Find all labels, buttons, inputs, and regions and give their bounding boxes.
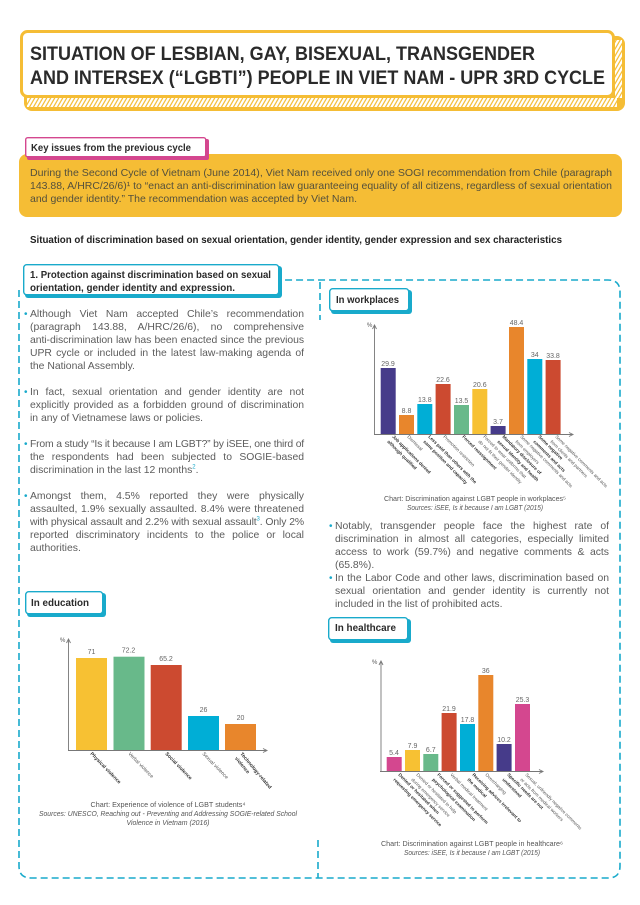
- heading: in workplaces: [330, 289, 412, 314]
- text: protection bullets: anti-discrimination law has been enacted since the previous: [30, 335, 304, 346]
- title banner: AND INTERSEX (“LGBTI”) PEOPLE IN VIET NAM - UPR 3RD CYCLE: [30, 68, 605, 89]
- heading: key issues: Key issues from the previous cycle: [31, 142, 191, 154]
- chart: workplaces: 8.8: [402, 408, 411, 415]
- heading: in healthcare: In healthcare: [335, 622, 396, 634]
- axis labels: education: Technology-related: [238, 751, 272, 790]
- text: protection bullets: explicitly provided as a forbidden ground of discrimination: [30, 400, 304, 411]
- axis labels: education: violence: [233, 756, 251, 775]
- text: protection bullets: in any of Vietnamese laws or policies.: [30, 413, 203, 424]
- chart: healthcare: 6.7: [426, 747, 436, 754]
- text: protection bullets: (paragraph 143.88, A/HRC/26/6), no comprehensive: [30, 322, 304, 333]
- heading: protection against discrimination: 1. Protection against discrimination based on sexual: [30, 269, 271, 281]
- chart: workplaces: 13.5: [455, 398, 468, 405]
- text: •: [329, 521, 333, 532]
- text: workplace bullets: (65.8%).: [335, 560, 374, 571]
- text: •: [24, 491, 28, 502]
- axis labels: healthcare: the medical: [466, 777, 488, 799]
- text: key issues body: and gender identity.” The recommendation was accepted by Viet Nam.: [30, 193, 357, 205]
- text: protection bullets: From a study “Is it because I am LGBT?” by iSEE, one third of: [30, 439, 304, 450]
- text: key issues body: During the Second Cycle of Vietnam (June 2014), Viet Nam received only one SOGI recommendation from Chile (paragraph: [30, 167, 612, 179]
- chart: education: 72.2: [122, 648, 135, 654]
- chart: workplaces: 48.4: [510, 320, 523, 327]
- chart: workplaces: %: [367, 323, 373, 329]
- panel: key issues background: [19, 154, 622, 217]
- text: •: [24, 439, 28, 450]
- axis labels: healthcare: Receiving advices irrelevant to: [471, 772, 523, 824]
- chart: education: 65.2: [159, 656, 173, 663]
- axis labels: workplaces: do not fit their gender identity: [477, 439, 523, 485]
- axis labels: healthcare: Overcharging: [484, 772, 508, 796]
- caption: education chart: Chart: Experience of violence of LGBT students⁴: [90, 800, 245, 809]
- axis labels: workplaces: Job applications denied: [391, 434, 432, 475]
- text: workplace bullets: access to work (59.7%) and negative comments & acts: [335, 547, 609, 558]
- title banner: [22, 32, 625, 111]
- axis labels: workplaces: Promotion restriction: [442, 434, 476, 468]
- chart: healthcare: 21.9: [442, 706, 456, 713]
- dashed section border: [19, 280, 620, 878]
- chart: healthcare: 36: [482, 668, 490, 675]
- text: workplace bullets: included in the list of prohibited acts.: [335, 599, 503, 610]
- axis labels: workplaces: Some negative comments and acts: [519, 434, 574, 489]
- axis labels: healthcare: Verbal medical treatment: [449, 772, 489, 812]
- axis labels: education: Social violence: [164, 751, 193, 782]
- text: workplace bullets: sexual orientation and gender identity is currently not: [335, 586, 609, 597]
- axis labels: healthcare: Denied or hesitated when: [397, 772, 440, 815]
- axis labels: workplaces: Some negative: [537, 434, 564, 461]
- text: workplace bullets: [329, 521, 610, 610]
- axis labels: healthcare: Denied or hesitated to help: [415, 772, 458, 815]
- axis labels: healthcare: Forced or suggested to perform: [436, 772, 489, 825]
- chart: workplaces: 34: [531, 352, 539, 359]
- caption: healthcare chart: [381, 839, 563, 857]
- axis labels: workplaces: Less paid than others with the: [427, 434, 478, 485]
- text: protection bullets: the respondents had been subjected to SOGIE-based: [30, 452, 304, 463]
- text: •: [329, 573, 333, 584]
- axis labels: healthcare: Sexual, unfriendly negative comments: [524, 772, 583, 831]
- text: protection bullets: UPR cycle or included in the latest law-making agenda of: [30, 348, 304, 359]
- text: key issues body: [30, 167, 612, 205]
- chart: workplaces: 29.9: [381, 361, 395, 368]
- caption: workplaces chart: [384, 494, 566, 512]
- caption: education chart: [39, 800, 297, 827]
- axis labels: healthcare: or acts from medical workers: [519, 777, 565, 823]
- caption: healthcare chart: Sources: iSEE, Is it because I am LGBT (2015): [404, 848, 540, 857]
- text: •: [24, 309, 28, 320]
- text: protection bullets: the National Assembly.: [30, 361, 135, 372]
- axis labels: education: Physical violence: [89, 751, 122, 786]
- caption: education chart: Violence in Vietnam (2016): [126, 818, 210, 827]
- caption: workplaces chart: Sources: iSEE, Is it because I am LGBT (2015): [407, 503, 543, 512]
- heading: in education: [26, 592, 106, 617]
- text: key issues body: 143.88, A/HRC/26/6)¹ to “enact an anti-discrimination law guaranteeing equality of all citizens, regardless of sexual orientation: [30, 180, 612, 192]
- axis labels: healthcare: during emergency service: [410, 777, 451, 818]
- axis labels: workplaces: although qualified: [386, 439, 418, 471]
- text: protection bullets: with physical assault and 2.2% with sexual assault3. Only 2%: [30, 517, 304, 528]
- chart: workplaces: 20.6: [473, 382, 487, 389]
- chart: workplaces: 13.8: [418, 397, 432, 404]
- axis labels: workplaces: same position and capacity: [422, 439, 469, 485]
- caption: workplaces chart: Chart: Discrimination against LGBT people in workplaces⁵: [384, 494, 566, 503]
- caption: education chart: Sources: UNESCO, Reaching out - Preventing and Addressing SOGIE-related School: [39, 809, 297, 818]
- text: protection bullets: Amongst them, 4.5% reported they were physically: [30, 491, 304, 502]
- text: protection bullets: authorities.: [30, 543, 81, 554]
- chart: healthcare: %: [372, 660, 378, 666]
- chart: workplaces: 3.7: [493, 419, 503, 426]
- chart: workplaces: [367, 320, 609, 494]
- chart: healthcare: [372, 660, 583, 836]
- axis labels: education: Verbal violence: [127, 751, 155, 780]
- chart: healthcare: 7.9: [408, 743, 417, 750]
- text: protection bullets: discrimination in the last 12 months2.: [30, 465, 199, 476]
- axis labels: education: [89, 751, 272, 795]
- heading: protection against discrimination: orientation, gender identity and expression.: [30, 282, 235, 294]
- text: workplace bullets: discrimination in almost all categories, especially limited: [335, 534, 609, 545]
- text: protection bullets: reported discriminatory incidents to the police or local: [30, 530, 304, 541]
- axis labels: healthcare: [392, 772, 583, 836]
- heading: situation of discrimination: Situation of discrimination based on sexual orientation, gender identity, gender expression and sex characteristics: [30, 234, 562, 246]
- axis labels: healthcare: psychological examination: [431, 777, 477, 822]
- axis labels: workplaces: Dismissal: [406, 434, 424, 452]
- axis labels: healthcare: understood: [501, 777, 523, 799]
- axis labels: workplaces: comments and acts: [532, 439, 567, 473]
- chart: education: %: [60, 638, 66, 644]
- chart: education: 26: [200, 707, 207, 714]
- heading: protection against discrimination: [24, 265, 282, 298]
- axis labels: workplaces: Mandatory disclosure of: [501, 434, 543, 476]
- caption: healthcare chart: Chart: Discrimination against LGBT people in healthcare⁶: [381, 839, 563, 848]
- axis labels: workplaces: Some negative comments and acts: [554, 434, 609, 489]
- chart: education: 20: [237, 715, 244, 722]
- heading: in education: In education: [31, 597, 89, 609]
- chart: education: [60, 638, 272, 795]
- text: protection bullets: [24, 309, 304, 554]
- heading: in workplaces: In workplaces: [336, 294, 399, 306]
- text: workplace bullets: In the Labor Code and other laws, discrimination based on: [335, 573, 609, 584]
- heading: key issues: [26, 138, 209, 160]
- text: workplace bullets: Notably, transgender people face the highest rate of: [335, 521, 609, 532]
- axis labels: workplaces: [386, 434, 609, 494]
- chart: workplaces: 33.8: [546, 353, 560, 360]
- axis labels: workplaces: Forced to wear uniforms that: [482, 434, 528, 480]
- text: protection bullets: In fact, sexual orientation and gender identity are not: [30, 387, 304, 398]
- text: •: [24, 387, 28, 398]
- axis labels: workplaces: from clients and partners: [549, 439, 589, 479]
- chart: healthcare: 5.4: [389, 750, 399, 757]
- axis labels: healthcare: Specific needs are not: [506, 772, 545, 811]
- heading: in healthcare: [329, 618, 411, 643]
- axis labels: workplaces: sexual identity and health: [496, 439, 540, 483]
- axis labels: workplaces: Forced reassignment: [461, 434, 498, 471]
- title banner: SITUATION OF LESBIAN, GAY, BISEXUAL, TRANSGENDER: [30, 44, 535, 65]
- chart: healthcare: 17.8: [461, 717, 474, 724]
- axis labels: education: Sexual violence: [201, 751, 229, 781]
- text: protection bullets: Although Viet Nam accepted Chile’s recommendation: [30, 309, 304, 320]
- text: protection bullets: assaulted, 1.9% sexually assaulted. 8.4% were threatened: [30, 504, 304, 515]
- axis labels: workplaces: from employers: [514, 439, 541, 466]
- chart: workplaces: 22.6: [436, 377, 450, 384]
- chart: healthcare: 10.2: [497, 737, 511, 744]
- chart: healthcare: 25.3: [516, 697, 529, 704]
- axis labels: healthcare: requesting emergency service: [392, 777, 443, 828]
- chart: education: 71: [88, 649, 95, 656]
